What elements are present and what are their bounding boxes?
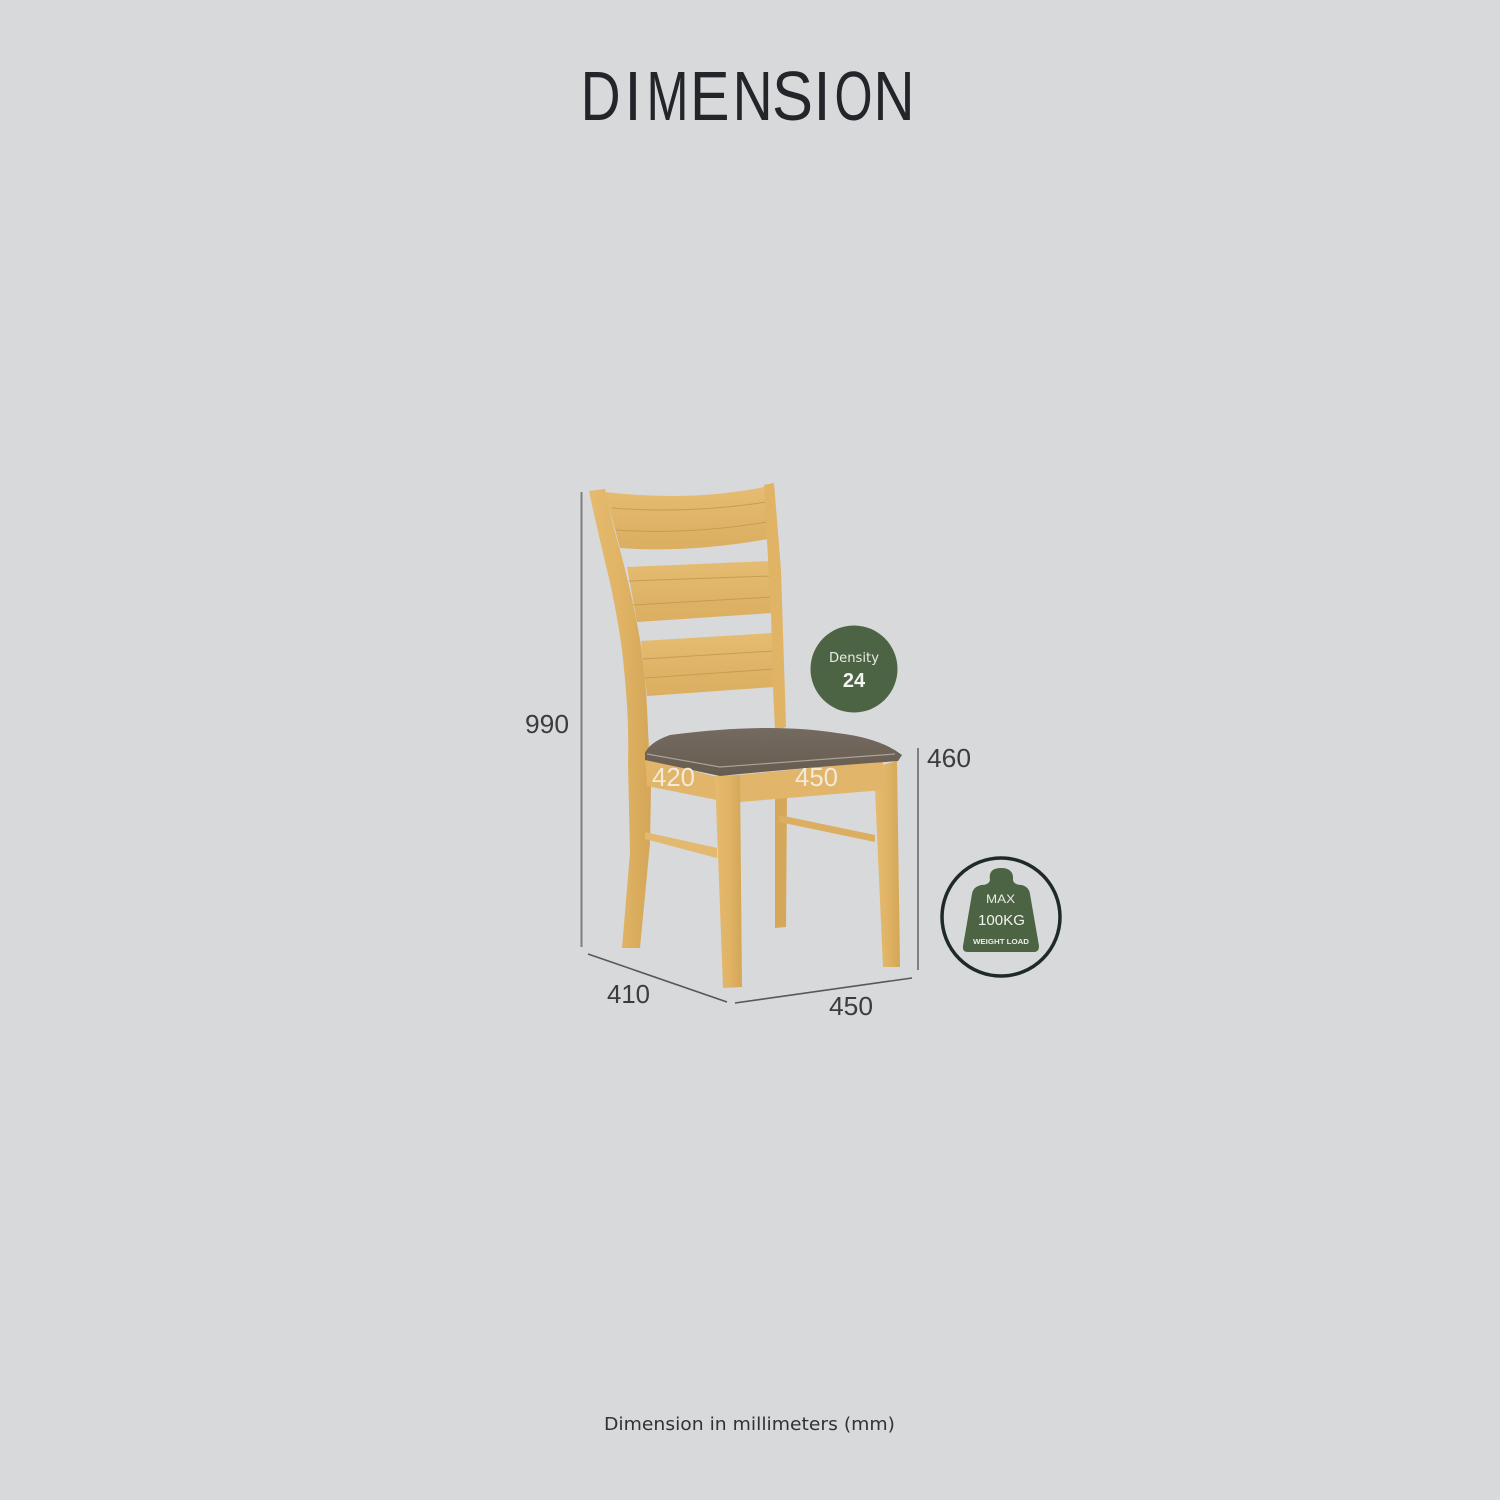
right back post bbox=[764, 483, 786, 730]
left apron bbox=[645, 758, 717, 800]
title bbox=[581, 57, 914, 135]
weight load badge: MAX bbox=[986, 894, 1015, 906]
title: S bbox=[772, 57, 813, 135]
label: seat width 450: 450 bbox=[795, 762, 838, 792]
label: depth 410: 410 bbox=[607, 979, 650, 1009]
dimension lines bbox=[582, 492, 918, 1003]
icon: weight bbox=[963, 868, 1039, 952]
weight load badge: WEIGHT LOAD bbox=[973, 937, 1030, 946]
density badge bbox=[810, 626, 898, 712]
right front leg bbox=[875, 761, 900, 967]
seat stitching bbox=[647, 754, 895, 767]
title: E bbox=[690, 57, 730, 135]
label: seat depth 420: 420 bbox=[652, 762, 695, 792]
weight load badge bbox=[942, 858, 1060, 976]
label: height 990: 990 bbox=[525, 709, 569, 739]
back right leg bbox=[775, 795, 787, 928]
weight load badge: 100KG bbox=[978, 912, 1025, 929]
backrest rails bbox=[605, 487, 774, 696]
title: N bbox=[733, 57, 773, 135]
footnote: Dimension in millimeters (mm) bbox=[604, 1414, 895, 1435]
seat cushion bbox=[645, 728, 902, 776]
left back post and rear leg bbox=[589, 489, 651, 948]
chair illustration bbox=[589, 483, 902, 988]
label: seat height 460: 460 bbox=[927, 743, 971, 773]
density badge: Density bbox=[829, 651, 879, 666]
density badge: 24 bbox=[843, 670, 866, 692]
title: N bbox=[874, 57, 914, 135]
front leg bbox=[715, 775, 742, 988]
right apron bbox=[738, 761, 883, 802]
title: I bbox=[814, 57, 830, 135]
left stretcher bbox=[645, 832, 717, 858]
title: D bbox=[581, 57, 621, 135]
label: width 450: 450 bbox=[829, 991, 873, 1021]
title: M bbox=[646, 57, 688, 135]
title: I bbox=[624, 57, 642, 135]
title: O bbox=[834, 57, 872, 135]
rear stretcher bbox=[779, 815, 875, 842]
